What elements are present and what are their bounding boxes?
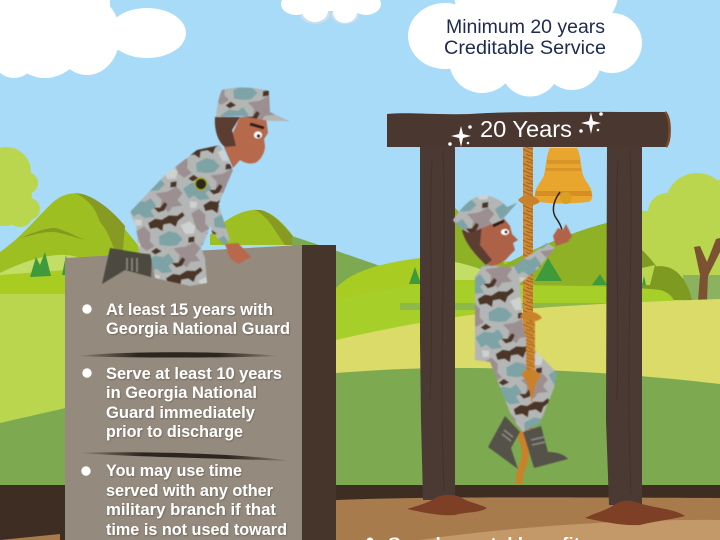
callout text: Creditable Service xyxy=(444,38,606,59)
wall front xyxy=(65,245,302,540)
item 1 xyxy=(82,301,290,338)
lower rope xyxy=(519,432,525,484)
bell cord xyxy=(553,192,562,230)
field: thin green stripe xyxy=(400,303,642,310)
tree: left bush xyxy=(0,147,40,227)
item 3 xyxy=(81,462,287,539)
wooden beam xyxy=(387,112,670,147)
item 2: in Georgia National xyxy=(106,384,257,402)
hand xyxy=(553,224,572,246)
cap xyxy=(453,195,517,233)
callout text xyxy=(444,17,606,59)
ground: brown soil xyxy=(336,497,720,540)
item 2 xyxy=(82,365,282,441)
item 2: Guard immediately xyxy=(106,404,256,422)
neck and face xyxy=(478,216,518,266)
torso xyxy=(130,145,233,260)
cloud: top left xyxy=(0,0,186,78)
callout text: Minimum 20 years xyxy=(446,17,605,38)
soldier: climbing rope xyxy=(453,195,572,484)
hair xyxy=(215,117,240,147)
ground: light soil xyxy=(420,520,720,540)
field: lower green left xyxy=(0,407,70,490)
bell xyxy=(535,148,592,230)
item 3: served with any other xyxy=(106,482,274,500)
field: bright green band xyxy=(336,284,675,345)
left boot xyxy=(488,416,520,469)
wall side xyxy=(302,245,336,540)
wall with eligibility list xyxy=(65,243,302,540)
ground: bottom left soil xyxy=(0,534,60,540)
neck and face xyxy=(224,117,268,168)
ground: dark strip xyxy=(0,485,720,540)
item 1: At least 15 years with xyxy=(106,301,273,319)
arm xyxy=(205,200,230,245)
torso and arm xyxy=(475,243,555,360)
eye xyxy=(493,221,509,235)
cloud: top centre small xyxy=(281,0,381,24)
icon: sparkle left xyxy=(448,125,472,147)
item 2: Serve at least 10 years xyxy=(106,365,282,383)
item 3: You may use time xyxy=(106,462,242,480)
post: left xyxy=(420,147,455,500)
hills: right of wall xyxy=(336,208,692,300)
post: right xyxy=(606,147,642,505)
boot over wall xyxy=(102,248,152,284)
beam label: 20 Years xyxy=(480,116,572,142)
hills: left and centre xyxy=(0,193,380,300)
field: left light green xyxy=(0,294,70,423)
right boot xyxy=(523,426,568,468)
tree: right bush xyxy=(642,173,720,302)
upper rope knot xyxy=(520,312,542,322)
bell clapper xyxy=(560,192,572,204)
dirt mound: left post xyxy=(407,495,487,515)
eye xyxy=(250,124,264,138)
item 1: Georgia National Guard xyxy=(106,320,290,338)
legs xyxy=(475,318,557,432)
cloud: minimum service callout xyxy=(408,0,642,96)
field: yellow xyxy=(336,299,720,400)
soldier: climbing over wall, behind the wall edge xyxy=(130,87,289,260)
tree trunk xyxy=(694,238,720,301)
icon: sparkle right xyxy=(579,112,603,134)
item 2: prior to discharge xyxy=(106,423,243,441)
dirt mound: right post xyxy=(585,501,685,525)
badge xyxy=(195,178,207,190)
hair xyxy=(462,224,492,265)
item 3: military branch if that xyxy=(106,501,277,519)
rope: upper xyxy=(518,147,540,437)
conifer trees xyxy=(30,252,646,285)
knee over wall xyxy=(150,245,207,286)
cap xyxy=(216,87,289,121)
field: lower green right xyxy=(336,368,720,490)
hand on wall xyxy=(225,243,251,264)
lower knot xyxy=(521,370,541,405)
front rope xyxy=(526,320,535,372)
item 3: time is not used toward xyxy=(106,521,287,539)
